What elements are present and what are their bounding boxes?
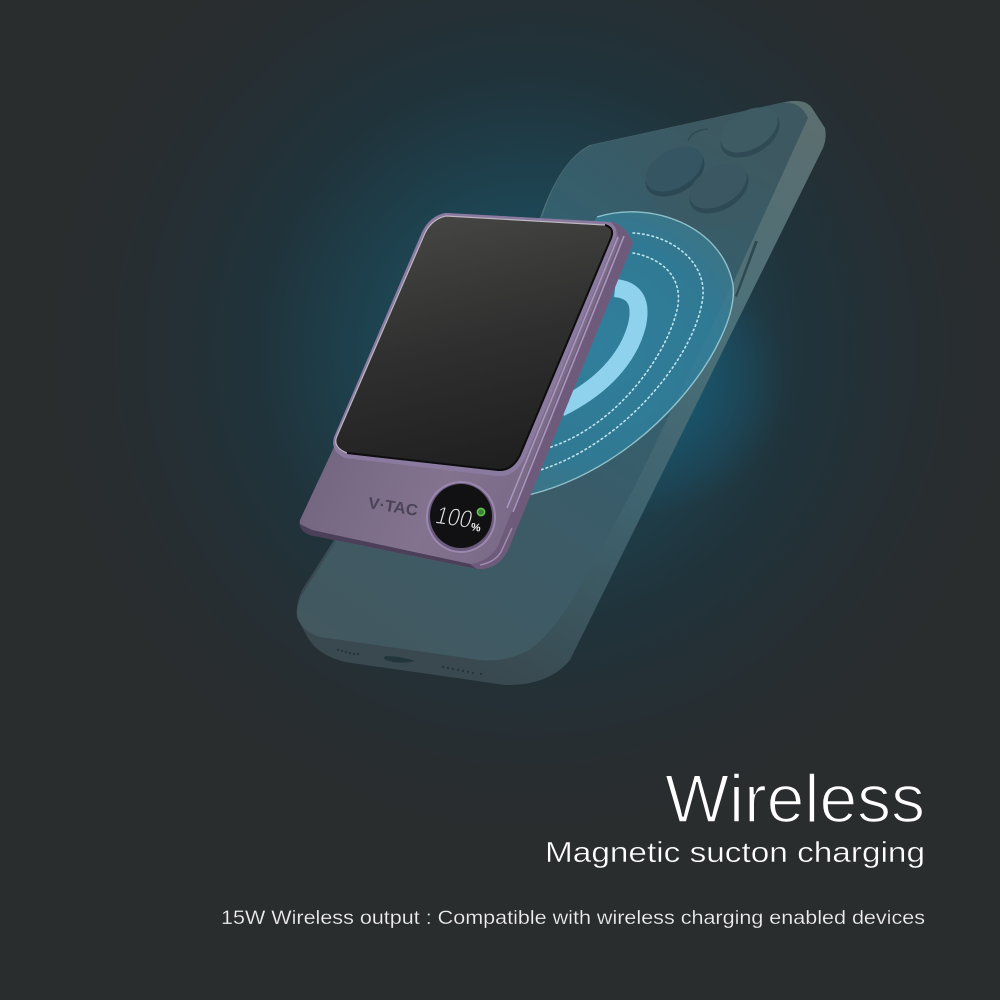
black panel: [336, 216, 612, 470]
dotted ring outer: [530, 233, 703, 473]
bottom edge: [300, 524, 477, 569]
body: [300, 213, 633, 569]
charging indicator: [477, 508, 485, 516]
camera lens top: [712, 98, 788, 167]
panel frame: [333, 213, 616, 476]
logo: V·TAC: [367, 495, 419, 520]
panel dark right edge: [347, 225, 612, 470]
bottom ports: [337, 649, 482, 675]
corner highlight: [480, 528, 512, 565]
flash: [688, 129, 708, 141]
wireless charging zone: [480, 212, 733, 500]
subtitle: Magnetic sucton charging: [545, 837, 925, 869]
side button: [735, 241, 758, 297]
phone side and bottom edge: [297, 101, 826, 685]
charging disc: [480, 212, 733, 500]
display: %: [470, 521, 482, 535]
thick light ring: [560, 288, 639, 408]
description: 15W Wireless output : Compatible with wireless charging enabled devices: [221, 908, 925, 929]
camera lens left: [637, 137, 713, 206]
dotted ring inner: [548, 253, 678, 448]
title: Wireless: [665, 761, 925, 837]
camera bump: [640, 106, 788, 227]
battery percent: 100: [432, 502, 476, 534]
outer ring: [520, 212, 733, 497]
camera lens bottom: [681, 154, 757, 223]
power bank: [300, 213, 633, 569]
phone: [297, 98, 826, 685]
right edge highlights: [507, 236, 624, 512]
panel highlight: [336, 216, 605, 453]
right edge: [470, 222, 633, 569]
display: [426, 481, 496, 553]
phone back face: [297, 103, 808, 660]
